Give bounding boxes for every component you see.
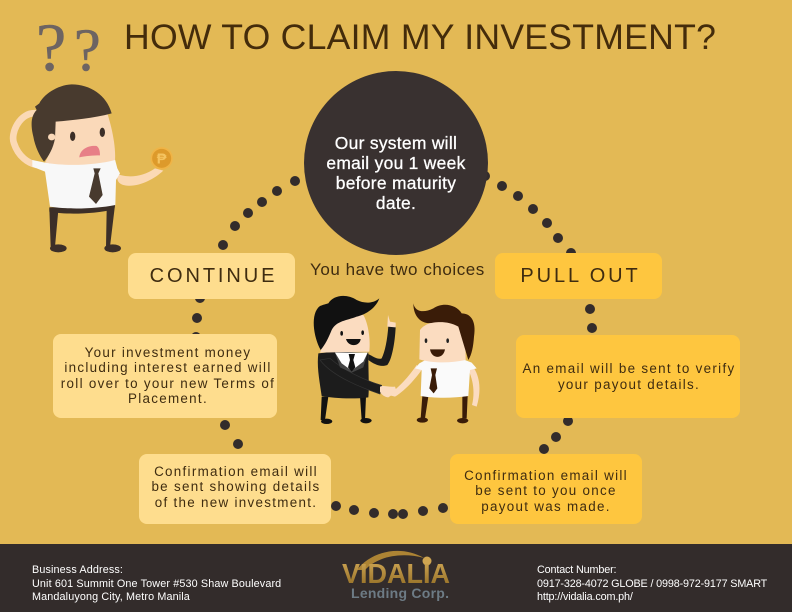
continue step 2: Confirmation email will: [154, 464, 318, 479]
continue step 2: be sent showing details: [151, 479, 321, 494]
pull out label: [495, 253, 662, 299]
pull out step 1: [516, 335, 740, 418]
contact details: Contact Number:: [537, 564, 616, 576]
center circle: Our system will: [335, 133, 457, 153]
center circle: email you 1 week: [326, 153, 466, 173]
pull out step 2: [450, 454, 642, 524]
continue step 2: [139, 454, 331, 524]
business address: Unit 601 Summit One Tower #530 Shaw Boulevard: [32, 578, 281, 590]
continue label: [128, 253, 295, 299]
business address: Mandaluyong City, Metro Manila: [32, 591, 190, 603]
contact details: 0917-328-4072 GLOBE / 0998-972-9177 SMART: [537, 578, 767, 590]
pull out step 2: payout was made.: [481, 499, 611, 514]
contact details: [537, 564, 767, 603]
man in white shirt: [388, 303, 479, 423]
icon: confused man holding coin: ₱: [157, 152, 167, 168]
center circle: [304, 71, 488, 255]
title: HOW TO CLAIM MY INVESTMENT?: [124, 17, 716, 57]
pull out step 1: your payout details.: [558, 376, 700, 392]
logo: Vidalia Lending Corp.: Lending Corp.: [351, 585, 449, 601]
logo: Vidalia Lending Corp.: VIDALIA: [342, 558, 450, 589]
pull out step 2: Confirmation email will: [464, 468, 628, 483]
continue step 1: roll over to your new Terms of: [61, 376, 275, 390]
business address: Business Address:: [32, 564, 123, 576]
continue step 1: Your investment money: [85, 345, 251, 360]
icon: question marks: [36, 10, 101, 80]
businessman: [314, 296, 397, 424]
continue step 1: including interest earned will: [64, 360, 272, 375]
business address: [32, 564, 281, 603]
pull out step 2: be sent to you once: [475, 483, 617, 498]
icon: confused man holding coin: [10, 84, 173, 252]
logo: Vidalia Lending Corp.: [342, 550, 450, 601]
continue step 1: Placement.: [128, 391, 208, 406]
contact details: http://vidalia.com.ph/: [537, 591, 633, 603]
continue step 2: of the new investment.: [155, 495, 317, 510]
pull out label: PULL OUT: [520, 264, 641, 286]
continue step 1: [53, 334, 277, 418]
footer bar: [0, 544, 792, 612]
center circle: date.: [376, 193, 416, 213]
continue label: CONTINUE: [150, 264, 277, 286]
subheading: You have two choices: [310, 260, 485, 279]
center circle: before maturity: [336, 173, 456, 193]
icon: two men shaking hands: [314, 296, 480, 424]
pull out step 1: An email will be sent to verify: [523, 361, 735, 376]
